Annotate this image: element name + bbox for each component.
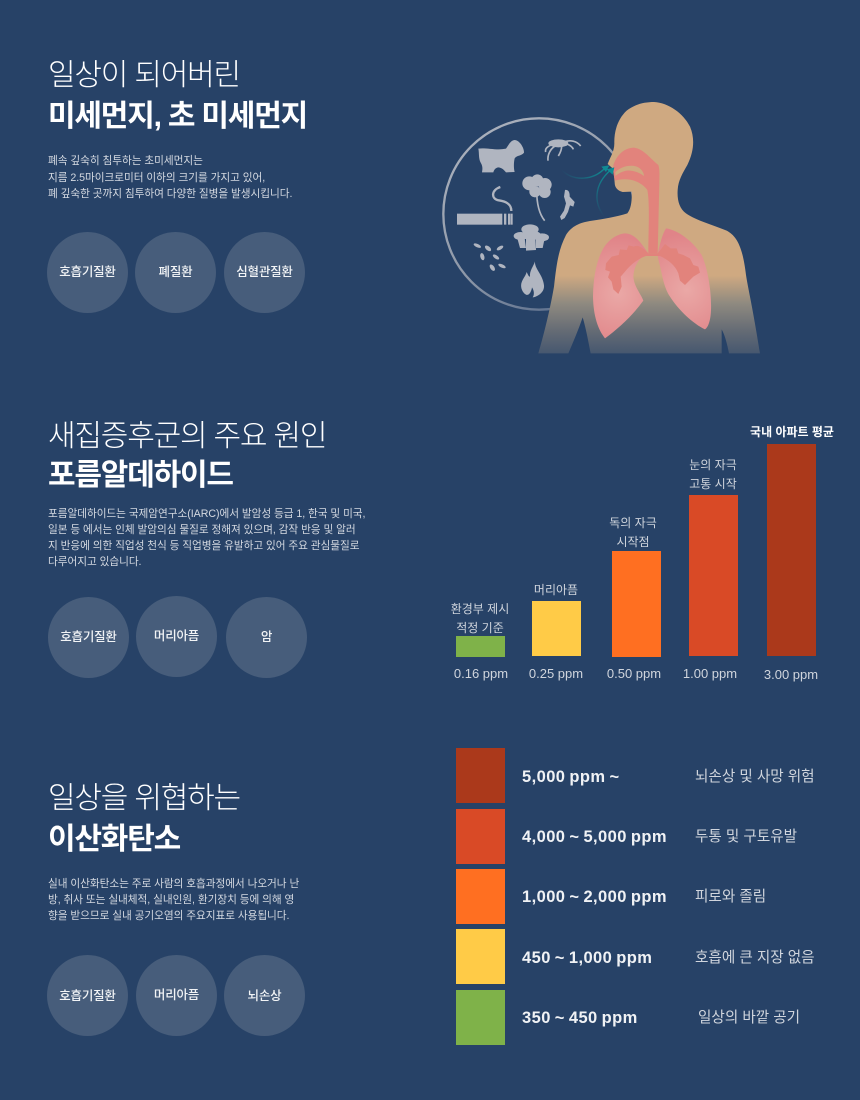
icon: bacteria [560,190,575,220]
heading: carbon dioxide bold: 이산화탄소 [48,823,180,856]
bar: 0.16 ppm [456,636,505,657]
badge: respiratory disease: 호흡기질환 [59,989,116,1003]
swatch: red [456,809,505,864]
icon: cigarette [457,187,513,225]
range: 4000-5000: 4,000 ~ 5,000 ppm [522,828,667,846]
left lung [593,233,648,338]
swatch: green [456,990,505,1045]
badge: cancer [226,597,307,678]
effect: brain damage and death: 뇌손상 및 사망 위험 [695,769,815,785]
heading: daily fine dust: 일상이 되어버린 [48,59,240,92]
badge: lung disease [135,232,216,313]
label: eye irritation pain [689,458,737,491]
text: formaldehyde description: 지 반응에 의한 직업성 천식 등 직업병을 유발하고 있어 주요 관심물질로 [48,540,360,552]
text: fine dust description: 폐 깊숙한 곳까지 침투하여 다양한 질병을 발생시킵니다. [48,188,292,200]
badge: respiratory disease [47,955,128,1036]
effect: outdoor air: 일상의 바깥 공기 [698,1010,800,1026]
effect: headache and vomiting: 두통 및 구토유발 [695,829,797,845]
text: fine dust description [48,154,292,200]
value: 1.00 ppm: 1.00 ppm [683,666,737,681]
text: formaldehyde description: 일본 등 에서는 인체 발암의심 물질로 정해져 있으며, 감작 반응 및 알러 [48,524,356,536]
text: formaldehyde description: 다루어지고 있습니다. [48,556,141,568]
label: eye irritation start: 시작점 [616,535,650,549]
badge: brain damage: 뇌손상 [248,989,281,1003]
section: formaldehyde [48,420,365,678]
text: CO2 description: 향을 받으므로 실내 공기오염의 주요지표로 사용됩니다. [48,910,289,922]
range: 350-450: 350 ~ 450 ppm [522,1009,638,1027]
icon: dog [478,140,524,172]
illustration: human respiratory system with allergens [442,102,760,354]
arrow: inhaled particles lower [597,167,614,216]
value: 0.25 ppm: 0.25 ppm [529,666,583,681]
label: eye irritation pain: 눈의 자극 [689,458,737,472]
badge: headache [136,955,217,1036]
badge: respiratory disease [47,232,128,313]
heading: fine dust bold: 미세먼지, 초 미세먼지 [48,100,307,133]
arrow: inhaled particles upper [562,165,609,178]
heading: formaldehyde bold: 포름알데하이드 [48,459,233,492]
icon: dust mite [546,139,581,161]
badge: brain damage [224,955,305,1036]
bronchi [605,244,700,294]
text: fine dust description: 폐속 깊숙히 침투하는 초미세먼지는 [48,155,203,167]
value: 0.50 ppm: 0.50 ppm [607,666,661,681]
right lung [658,228,711,329]
bar chart: formaldehyde levels [451,425,834,682]
label: eye irritation pain: 고통 시작 [689,477,737,491]
badge: cancer: 암 [261,630,272,644]
badge: headache [136,596,217,677]
swatch: yellow [456,929,505,984]
text: formaldehyde description [48,508,365,568]
heading: threatening daily life: 일상을 위협하는 [48,782,240,815]
swatch: dark red [456,748,505,803]
heading: sick house syndrome: 새집증후군의 주요 원인 [48,420,326,453]
bar: 3.00 ppm [767,444,816,656]
bar: 1.00 ppm [689,495,738,656]
label: guideline: 환경부 제시 [451,602,509,616]
text: formaldehyde description: 포름알데하이드는 국제암연구소(IARC)에서 발암성 등급 1, 한국 및 미국, [48,508,365,520]
range: 450-1000: 450 ~ 1,000 ppm [522,949,652,967]
effect: fatigue and drowsiness: 피로와 졸림 [695,889,766,905]
label: apartment average: 국내 아파트 평균 [750,425,834,439]
icon: clover [522,174,552,221]
value: 0.16 ppm: 0.16 ppm [454,666,508,681]
text: CO2 description: 실내 이산화탄소는 주로 사람의 호흡과정에서 나오거나 난 [48,878,299,890]
text: CO2 description: 방, 취사 또는 실내체적, 실내인원, 환기장치 등에 의해 영 [48,894,294,906]
text: fine dust description: 지름 2.5마이크로미터 이하의 크기를 가지고 있어, [48,172,265,184]
text: CO2 description [48,878,299,922]
label: eye irritation start [609,516,657,549]
airway [613,148,659,253]
section: carbon dioxide [47,782,305,1036]
badge: headache: 머리아픔 [154,629,199,643]
badge: cardiovascular disease: 심혈관질환 [236,265,293,279]
label: headache: 머리아픔 [534,583,578,597]
badge: respiratory disease [48,597,129,678]
badge: lung disease: 폐질환 [159,265,192,279]
bar: 0.50 ppm [612,551,661,657]
icon: mushrooms [514,224,549,251]
section: fine dust [47,59,760,354]
icon: flame [521,261,544,297]
label: guideline: 적정 기준 [456,621,504,635]
badge: headache: 머리아픔 [154,988,199,1002]
badge: respiratory disease: 호흡기질환 [59,265,116,279]
body silhouette [538,102,760,353]
range: 1000-2000: 1,000 ~ 2,000 ppm [522,888,667,906]
label: eye irritation start: 독의 자극 [609,516,657,530]
allergen ring [443,118,635,310]
icon: pollen [473,242,506,272]
range: 5000: 5,000 ppm ~ [522,768,620,786]
badge: cardiovascular disease [224,232,305,313]
effect: no breathing issue: 호흡에 큰 지장 없음 [695,950,815,966]
label: guideline [451,602,509,635]
badge: respiratory disease: 호흡기질환 [60,630,117,644]
swatch: orange [456,869,505,924]
value: 3.00 ppm: 3.00 ppm [764,667,818,682]
mouth band [615,166,644,176]
bar: 0.25 ppm [532,601,581,656]
